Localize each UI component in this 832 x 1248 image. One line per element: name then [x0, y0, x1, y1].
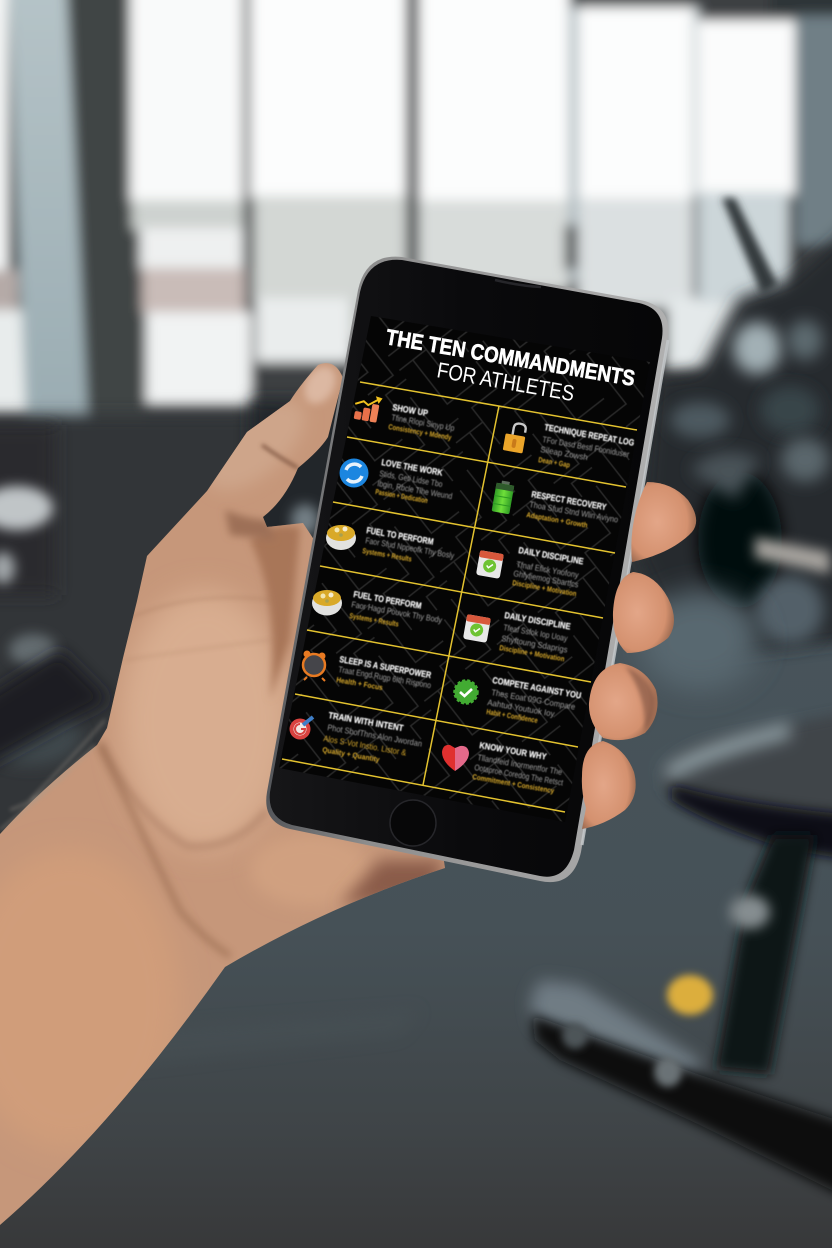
finger four	[582, 741, 636, 829]
item 4: respect recovery: Adaptation + Growth	[526, 510, 589, 530]
finger three	[589, 663, 658, 740]
item 1: show up: Tfine Rlopi Sinyp Up	[391, 412, 456, 433]
item 5: fuel to perform: FUEL TO PERFORM	[366, 525, 434, 547]
icon: green check badge	[454, 680, 478, 704]
item 1: show up	[388, 402, 456, 442]
item 7: fuel to perform repeat: Faor Hagd Pouvok Thy Body	[351, 599, 444, 625]
fingers	[582, 482, 696, 829]
item 9: sleep: SLEEP IS A SUPERPOWER	[339, 654, 432, 680]
item 5: fuel to perform: Systems + Results	[362, 546, 412, 564]
item 3: love the work	[375, 457, 453, 505]
item 2: technique: TFor Dasd Bestl Fooniduser	[542, 434, 630, 459]
home button	[390, 800, 436, 846]
icon: food bowl	[326, 525, 356, 550]
icon: refresh circle	[340, 458, 368, 488]
item 9: sleep: Health + Focus	[336, 675, 384, 692]
icon: food bowl repeat	[312, 590, 342, 616]
item 3: love the work: Stids, Geti Lidse Tbo	[379, 468, 444, 489]
item 2: technique: Dean + Gap	[538, 455, 571, 470]
screen	[279, 316, 650, 822]
item 12: know your why	[472, 740, 565, 796]
item 6: daily discipline: DAILY DISCIPLINE	[518, 545, 584, 566]
background: gym machines right	[640, 198, 832, 690]
grid lines	[282, 382, 637, 812]
item 7: fuel to perform repeat: Systems + Results	[349, 611, 399, 629]
item 11: train with intent	[322, 710, 423, 764]
item 12: know your why: Ootaproe Coredog The Retsct	[474, 762, 565, 788]
item 12: know your why: Commitment + Consistency	[472, 772, 556, 796]
finger one	[631, 482, 696, 562]
item 4: respect recovery: RESPECT RECOVERY	[531, 489, 607, 512]
item 12: know your why: KNOW YOUR WHY	[479, 740, 547, 762]
item 4: respect recovery	[526, 489, 619, 530]
item 6: daily discipline: Ghfyfiemog Sbartfcs	[513, 568, 579, 589]
item 9: sleep	[336, 654, 432, 692]
item 1: show up: SHOW UP	[392, 402, 429, 418]
item 11: train with intent: Quality + Quantity	[322, 745, 381, 764]
hand: palm, thumb and forearm	[0, 340, 460, 1240]
item 10: compete	[486, 675, 582, 725]
icon: alarm clock	[303, 650, 326, 681]
icon: calendar repeat	[463, 614, 491, 643]
item 3: love the work: Passion + Dedication	[375, 487, 429, 505]
item 11: train with intent: Alos S-Vot Instio. Listor &	[323, 733, 407, 758]
item 8: daily discipline repeat: DAILY DISCIPLINE	[504, 610, 571, 632]
item 10: compete: Thes Eoat 09G Compare	[491, 687, 576, 712]
item 3: love the work: Ibgin, Rbcle Tlhe Weund	[377, 478, 453, 501]
item 2: technique: TECHNIQUE REPEAT LOG	[544, 422, 635, 448]
phone body	[266, 257, 668, 882]
item 7: fuel to perform repeat: FUEL TO PERFORM	[353, 589, 422, 611]
arm hair	[0, 720, 105, 830]
item 11: train with intent: Phot SbofThns Alon Jwordan	[327, 722, 423, 749]
item 6: daily discipline: Discipline + Motivation	[512, 578, 578, 598]
item 10: compete: Aahtud Youtuok Ioy	[487, 697, 556, 719]
phone	[260, 257, 668, 882]
item 4: respect recovery: Thoa Sfud Stnd Wlin Aviyno	[529, 499, 619, 525]
item 8: daily discipline repeat: Tfeaf Ssfok Iop Uoay	[503, 622, 569, 643]
item 2: technique: Sileap Zowsh	[540, 444, 589, 462]
title: THE TEN COMMANDMENTS	[384, 324, 637, 391]
item 3: love the work: LOVE THE WORK	[381, 457, 444, 478]
item 5: fuel to perform: Faor Sfud Nppeofk Thy Bosly	[365, 535, 456, 561]
finger two	[613, 572, 674, 653]
item 11: train with intent: TRAIN WITH INTENT	[328, 710, 405, 733]
item 7: fuel to perform repeat	[349, 589, 444, 629]
icon: calendar	[476, 550, 504, 579]
icon: bar chart with arrow	[353, 393, 383, 423]
icon: target with dart	[290, 717, 313, 740]
item 8: daily discipline repeat: Discipline + Motivation	[499, 643, 566, 663]
background: floor and left equipment	[0, 400, 832, 1248]
background: bench	[530, 712, 832, 1200]
title: FOR ATHLETES	[435, 357, 576, 406]
item 2: technique	[538, 422, 635, 470]
item 10: compete: COMPETE AGAINST YOU	[492, 675, 582, 701]
item text blocks	[322, 402, 635, 796]
item 5: fuel to perform	[362, 525, 456, 564]
item 1: show up: Consistency + Mdendy	[388, 422, 453, 442]
item 8: daily discipline repeat: Shyftoung Sdaprigs	[501, 633, 568, 655]
item 12: know your why: Tllandfeid Inormentfor The	[477, 752, 563, 777]
icon: heart	[442, 745, 469, 771]
item 9: sleep: Traat Engd Rugp 6Ith Rispono	[338, 664, 432, 690]
item 8: daily discipline repeat	[499, 610, 571, 663]
item 6: daily discipline: Tfnaf Efick Ynofony	[516, 559, 580, 580]
item 10: compete: Habit + Confidence	[486, 707, 538, 725]
item 6: daily discipline	[512, 545, 584, 598]
icon: padlock	[503, 421, 527, 454]
icon: battery	[492, 480, 515, 514]
